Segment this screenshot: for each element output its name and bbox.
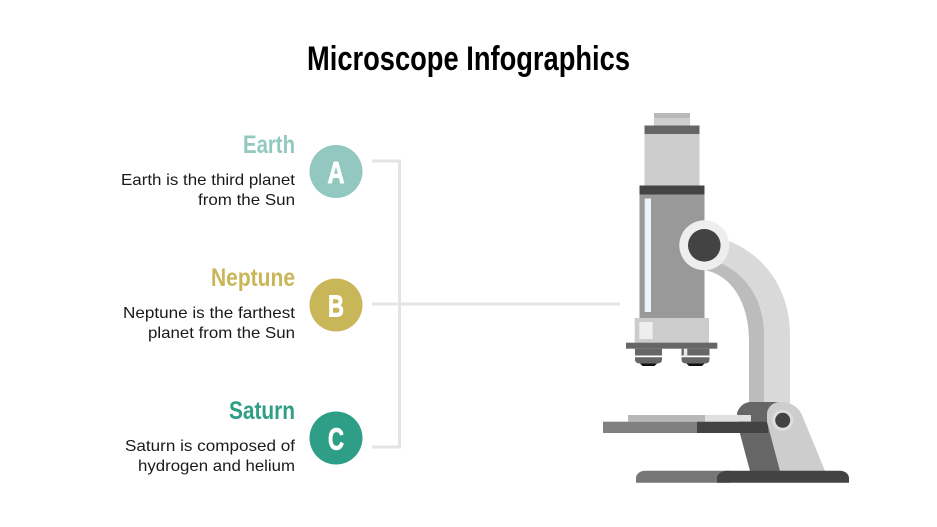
- text: Neptune description: [123, 305, 296, 342]
- text: Saturn description: [125, 438, 296, 475]
- item B: Neptune: [123, 264, 362, 342]
- microscope arm: [704, 240, 790, 406]
- item C: Saturn: [125, 397, 362, 475]
- text: Neptune description: planet from the Sun: [148, 325, 295, 342]
- right objective lens: [682, 349, 710, 366]
- microscope base: [636, 471, 849, 483]
- left objective lens: [635, 349, 662, 366]
- heading: Neptune: Neptune: [211, 264, 295, 292]
- pivot knob: [772, 410, 793, 431]
- text: Saturn description: hydrogen and helium: [138, 458, 295, 475]
- text: Neptune description: Neptune is the farthest: [123, 305, 296, 322]
- microscope tube: [640, 186, 704, 318]
- pivot bracket: [767, 402, 825, 471]
- badge C: [310, 412, 362, 464]
- heading: Earth: Earth: [243, 131, 295, 159]
- title: Microscope Infographics: [307, 40, 630, 78]
- eyepiece: [644, 113, 700, 186]
- microscope neck: [737, 402, 790, 471]
- badge B: [310, 278, 362, 332]
- icon: microscope: [603, 113, 849, 483]
- connector lines: [372, 161, 620, 447]
- text: Saturn description: Saturn is composed of: [125, 438, 296, 455]
- heading: Saturn: Saturn: [229, 397, 295, 425]
- item A: Earth: [121, 131, 362, 209]
- badge A: A: [328, 155, 344, 190]
- nosepiece: [626, 318, 717, 349]
- text: Earth description: [121, 172, 296, 209]
- text: Earth description: Earth is the third planet: [121, 172, 296, 189]
- badge A: [310, 145, 362, 198]
- badge C: C: [328, 422, 344, 456]
- focus joint: [679, 220, 729, 270]
- text: Earth description: from the Sun: [198, 192, 295, 209]
- badge B: B: [328, 288, 344, 324]
- microscope stage: [603, 415, 768, 433]
